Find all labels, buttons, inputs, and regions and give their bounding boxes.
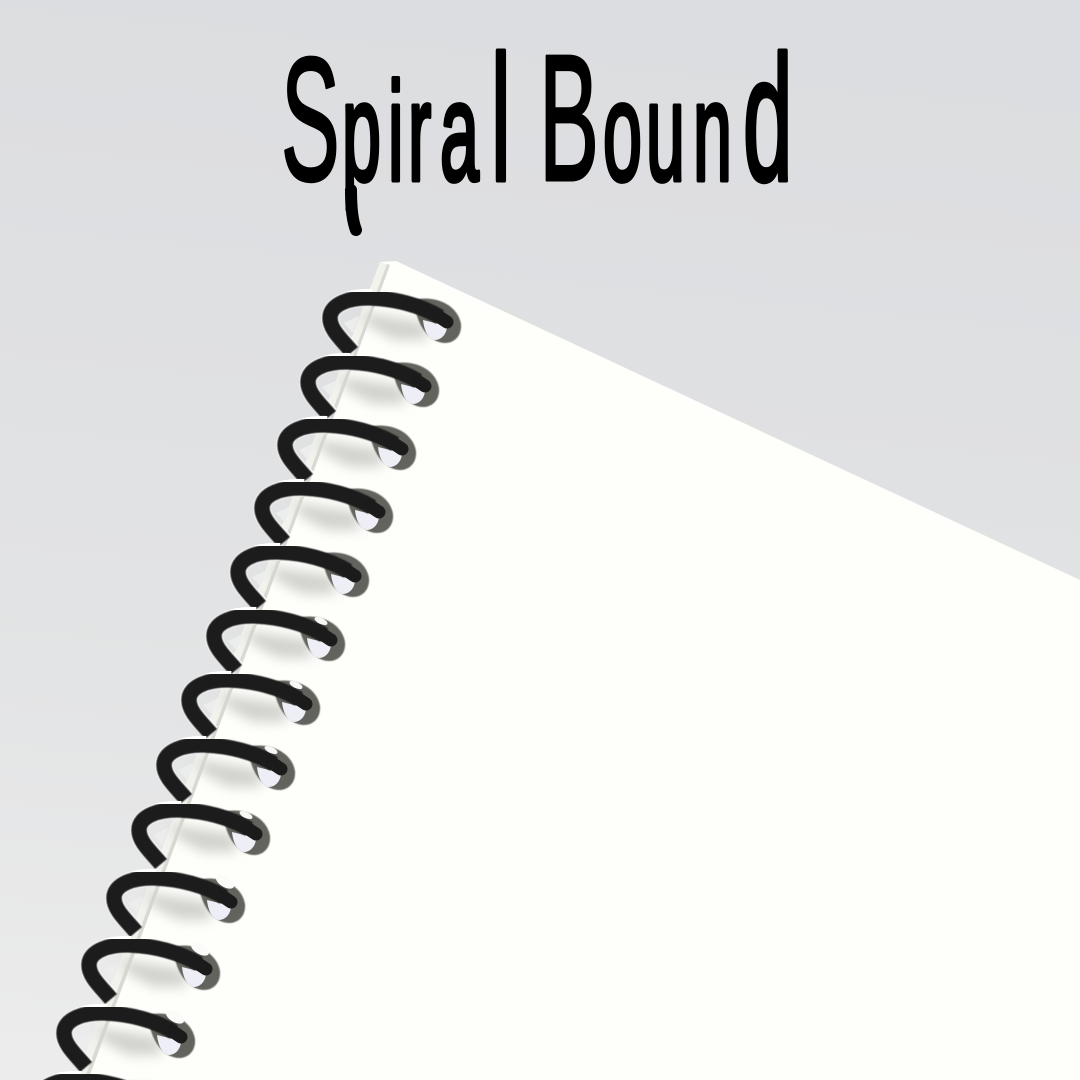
title: u (646, 55, 685, 210)
title: B (539, 18, 599, 219)
notebook paper (76, 261, 1080, 1080)
title: p (342, 55, 381, 210)
title: n (693, 55, 732, 210)
title: l (491, 19, 511, 218)
paper spine strip (76, 262, 387, 1080)
title: i (388, 55, 404, 210)
title: d (743, 19, 792, 218)
spiral binding coils (39, 298, 461, 1080)
title: o (603, 55, 642, 210)
title: r (408, 55, 431, 210)
title: S (281, 22, 340, 218)
title (281, 18, 792, 230)
title: a (440, 55, 479, 210)
